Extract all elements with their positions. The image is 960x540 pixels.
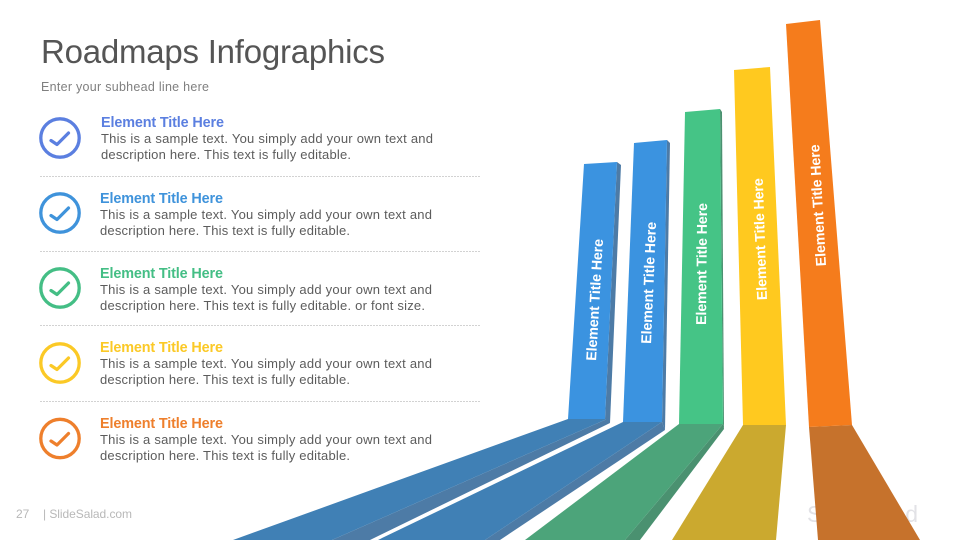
road 2 floor side — [485, 422, 665, 540]
road 3 label: Element Title Here — [694, 203, 711, 325]
road 4 label: Element Title Here — [751, 178, 771, 300]
item 2 description: description here. This text is fully editable. — [100, 223, 350, 238]
item 1 description: description here. This text is fully editable. — [101, 147, 351, 162]
watermark: SlideSalad — [807, 501, 918, 527]
footer: 27 — [16, 507, 30, 521]
road 5 label: Element Title Here — [807, 144, 830, 267]
road 1 label: Element Title Here — [584, 238, 607, 361]
road 5 tower — [786, 20, 852, 427]
list item 4 — [41, 340, 432, 387]
icon: yellow check circle — [41, 344, 79, 382]
list item 2 — [41, 191, 432, 238]
road 5 floor — [809, 425, 920, 540]
road 4: yellow — [672, 67, 786, 540]
item 1 description: This is a sample text. You simply add your own text and — [101, 131, 433, 146]
item 4 heading: Element Title Here — [100, 340, 223, 356]
item 2 description — [100, 207, 432, 238]
road 3 tower — [679, 109, 723, 424]
item 5 heading: Element Title Here — [100, 416, 223, 432]
list item 5 — [41, 416, 432, 463]
item 3 description: description here. This text is fully editable. or font size. — [100, 298, 425, 313]
item 1 description — [101, 131, 433, 162]
icon: orange check circle — [41, 419, 79, 458]
road 1 floor side — [332, 419, 610, 540]
icon: green check circle — [41, 269, 79, 307]
item 4 description — [100, 356, 432, 387]
title: Roadmaps Infographics — [41, 33, 385, 70]
road 1 floor — [233, 419, 607, 540]
road 1 tower — [568, 162, 617, 419]
road 2: blue — [378, 140, 670, 540]
item 4 description: This is a sample text. You simply add your own text and — [100, 356, 432, 371]
item 3 heading: Element Title Here — [100, 266, 223, 282]
item 5 description — [100, 432, 432, 463]
road 2 floor — [378, 422, 662, 540]
road 3 tower side — [720, 109, 724, 429]
icon: blue check circle — [41, 194, 79, 232]
item 1 heading: Element Title Here — [101, 115, 224, 131]
item 3 description: This is a sample text. You simply add your own text and — [100, 282, 432, 297]
road 5: orange — [786, 20, 920, 540]
road 2 tower side — [662, 140, 670, 430]
subhead: Enter your subhead line here — [41, 80, 209, 94]
list item 1 — [41, 115, 433, 162]
footer: | SlideSalad.com — [43, 507, 132, 521]
road 1: blue — [233, 162, 621, 540]
list item 3 — [41, 266, 432, 313]
road 3: green — [525, 109, 724, 540]
item 2 heading: Element Title Here — [100, 191, 223, 207]
icon: blue-violet check circle — [41, 119, 79, 157]
item 2 description: This is a sample text. You simply add your own text and — [100, 207, 432, 222]
road 1 tower side — [605, 162, 621, 423]
road 2 tower — [623, 140, 667, 422]
item 5 description: This is a sample text. You simply add your own text and — [100, 432, 432, 447]
road 2 label: Element Title Here — [639, 222, 660, 344]
item 4 description: description here. This text is fully editable. — [100, 372, 350, 387]
road 3 floor side — [625, 424, 724, 540]
road 3 floor — [525, 424, 723, 540]
road 4 tower — [734, 67, 786, 425]
item 5 description: description here. This text is fully editable. — [100, 448, 350, 463]
road 4 floor — [672, 425, 786, 540]
item 3 description — [100, 282, 432, 313]
